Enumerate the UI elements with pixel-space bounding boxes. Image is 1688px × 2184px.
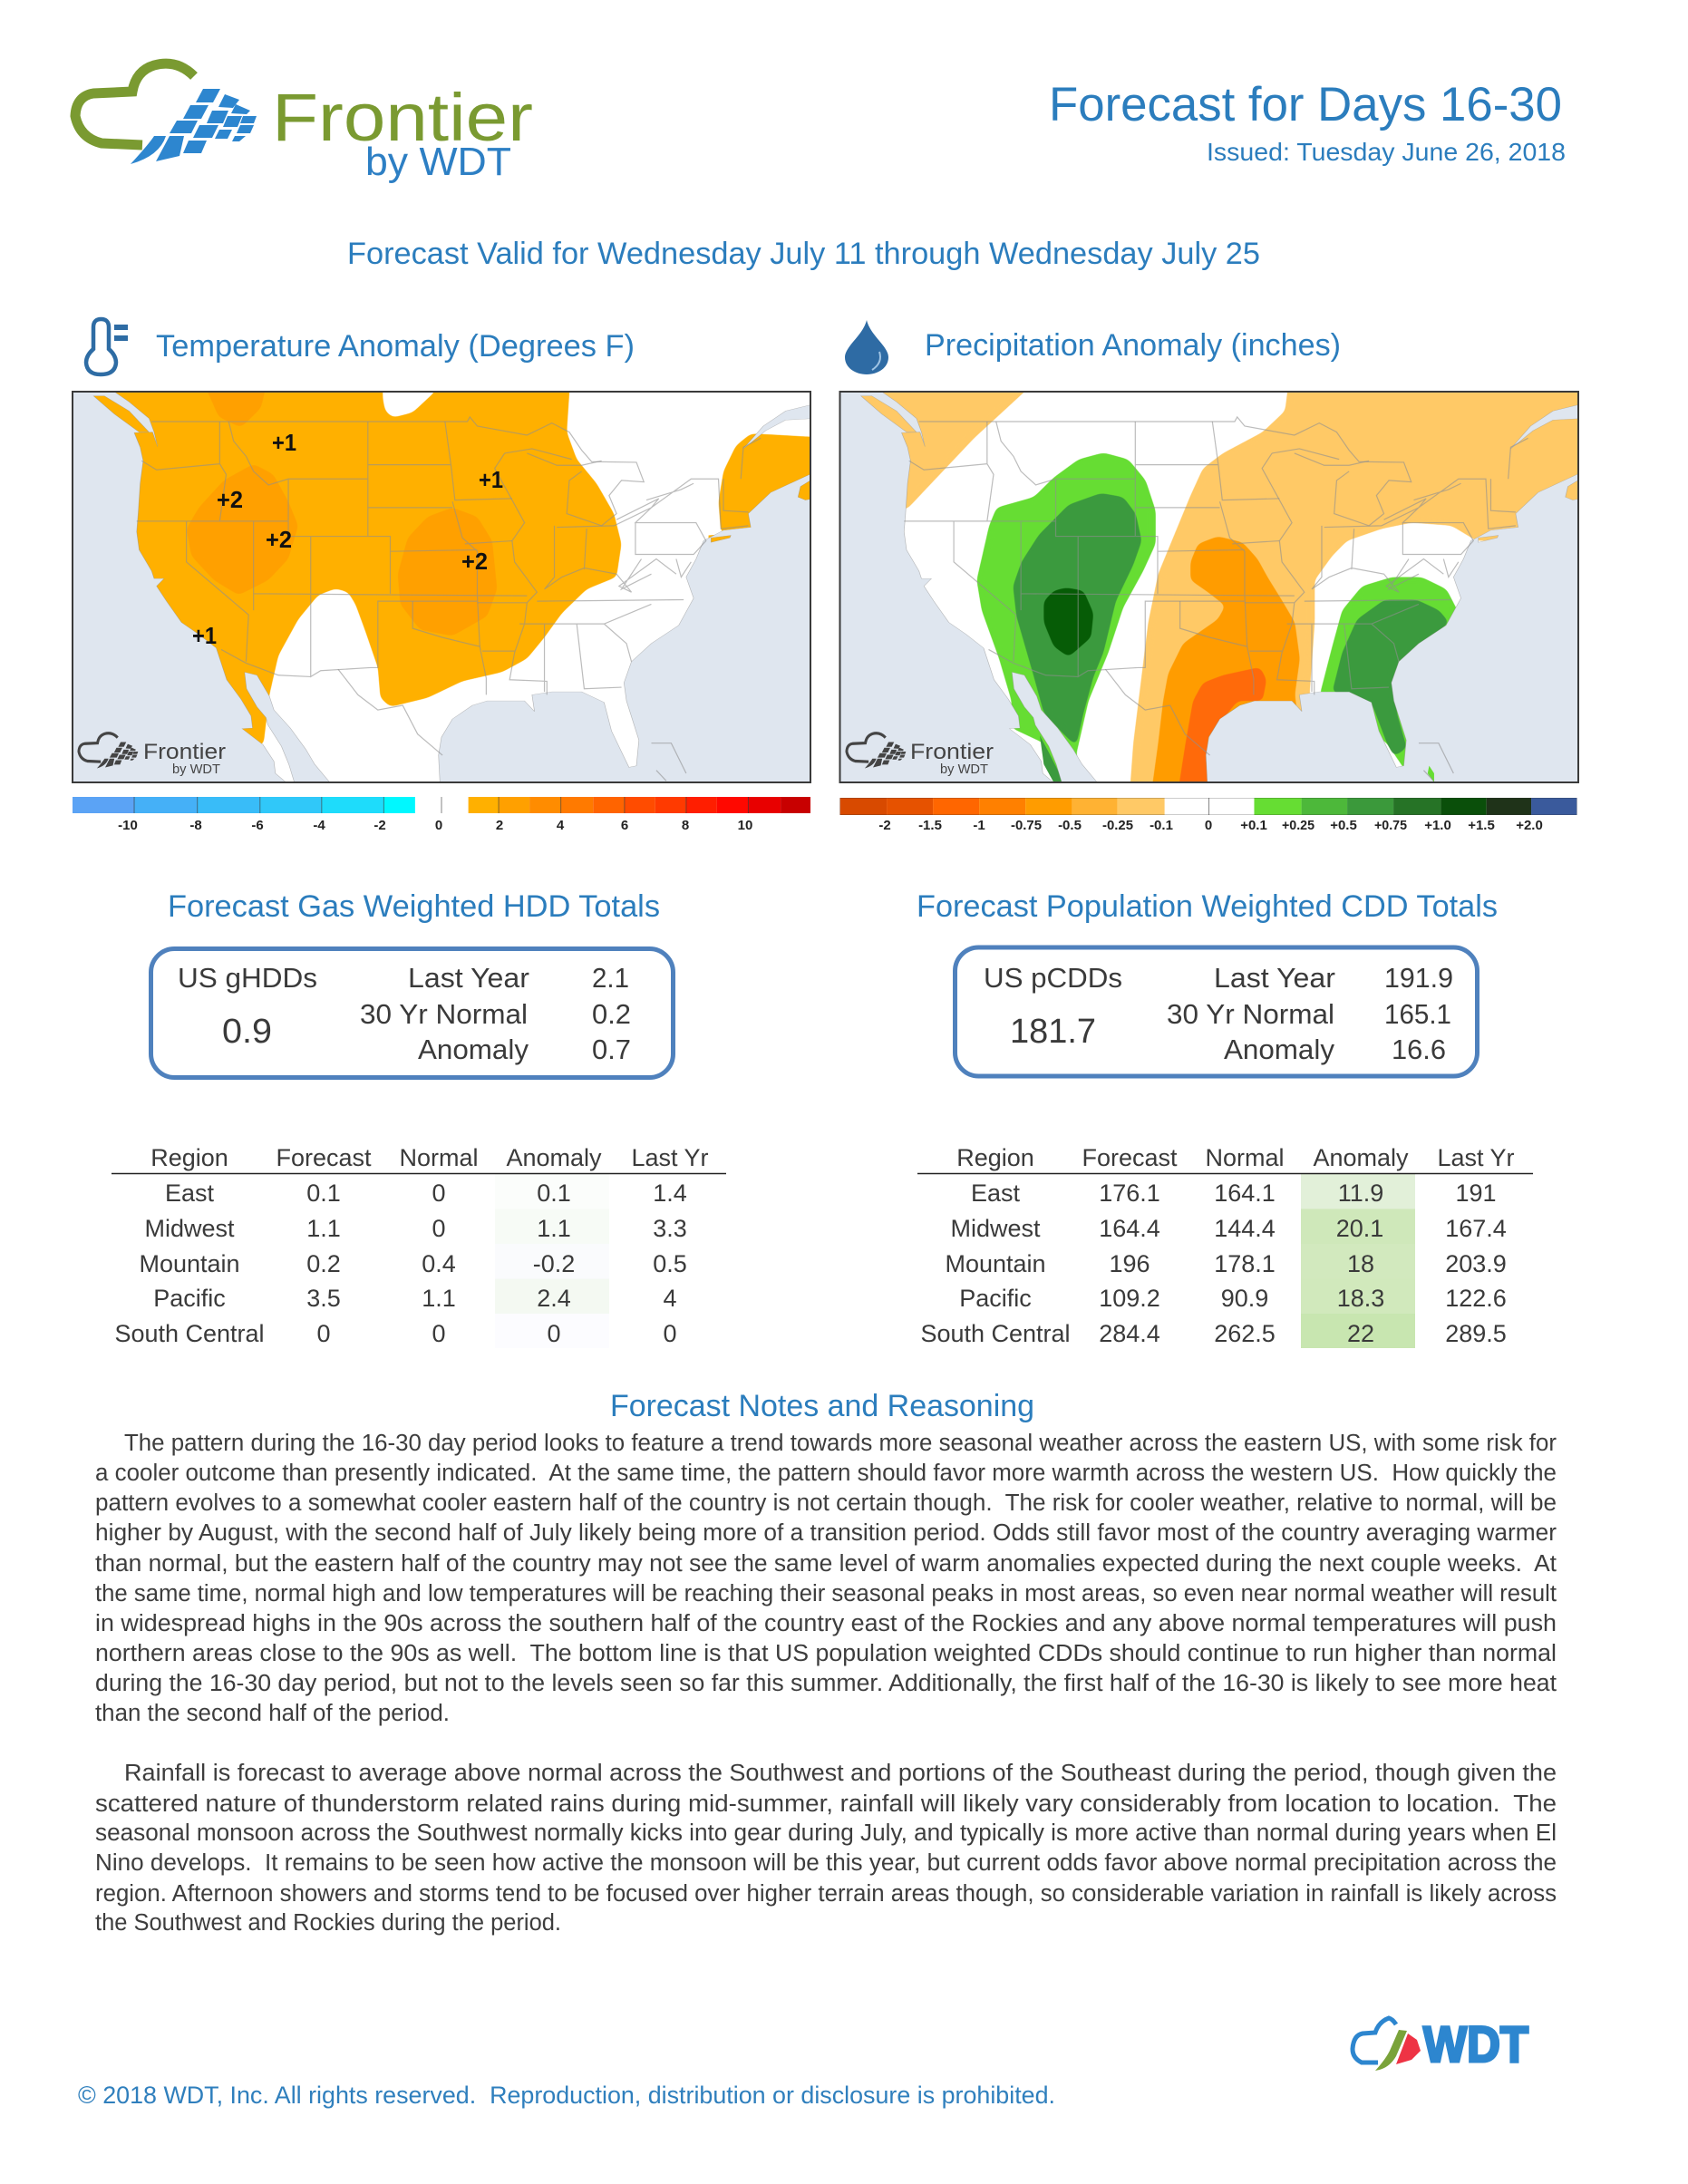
legend: temperature colour scale: -8 — [189, 818, 202, 833]
summary box: US gHDDs: 2.1 — [592, 962, 629, 994]
table: HDD by region: 0 — [432, 1215, 446, 1242]
text block: rainfall notes: scattered nature of thunderstorm related rains during mid-summer, rainfall will likely vary considerably from location to location. The — [95, 1791, 1557, 1817]
text block: temperature notes: higher by August, with the second half of July likely being more of a transition period. Odds still favor most of the country averaging warmer — [95, 1520, 1557, 1546]
table: CDD by region: 176.1 — [1099, 1179, 1160, 1207]
map labels: +1 — [272, 429, 296, 456]
legend: precipitation colour scale: +0.1 — [1240, 818, 1267, 833]
icon: thermometer — [86, 319, 128, 374]
summary box: US pCDDs: 191.9 — [1384, 962, 1453, 994]
summary box: US pCDDs: 181.7 — [1010, 1013, 1096, 1051]
heading: precipitation anomaly: Precipitation Anomaly (inches) — [925, 328, 1341, 363]
logo: Frontier by WDT — [75, 63, 533, 184]
legend: temperature colour scale: 10 — [738, 818, 752, 833]
table: HDD by region: 1.1 — [306, 1215, 341, 1242]
footer: copyright: © 2018 WDT, Inc. All rights reserved. Reproduction, distribution or disclosure is prohibited. — [78, 2082, 1055, 2109]
table: CDD by region: Mountain — [945, 1250, 1046, 1277]
logo: WDT — [1353, 2015, 1528, 2072]
table: HDD by region: 2.4 — [537, 1285, 571, 1312]
map labels — [192, 429, 503, 649]
map logo — [79, 733, 226, 777]
legend: temperature colour scale: 6 — [621, 818, 628, 833]
table: CDD by region: 18 — [1347, 1250, 1374, 1277]
map frame — [839, 392, 1578, 782]
text block: temperature notes — [95, 1431, 1557, 1726]
legend: temperature colour scale: 0 — [435, 818, 442, 833]
table: HDD by region: 1.1 — [537, 1215, 571, 1242]
map labels: +2 — [217, 486, 243, 513]
table: HDD by region: 0 — [663, 1320, 677, 1347]
legend: temperature colour scale: -6 — [251, 818, 264, 833]
table: HDD by region: 0.1 — [537, 1179, 571, 1207]
table: CDD by region: 196 — [1109, 1250, 1150, 1277]
legend: precipitation colour scale: -1 — [973, 818, 985, 833]
text block: rainfall notes — [95, 1761, 1557, 1936]
table: CDD by region: Normal — [1205, 1144, 1285, 1171]
legend: precipitation colour scale — [839, 798, 1577, 833]
summary box: US gHDDs: 0.7 — [592, 1034, 631, 1065]
table: HDD by region: 0 — [432, 1179, 446, 1207]
summary box: US gHDDs: Last Year — [408, 962, 529, 994]
title: Forecast for Days 16-30: Forecast for Days 16-30 — [1049, 78, 1562, 131]
table: CDD by region: 284.4 — [1099, 1320, 1160, 1347]
table: CDD by region: Anomaly — [1313, 1144, 1409, 1171]
table: HDD by region: 1.4 — [653, 1179, 687, 1207]
legend: precipitation colour scale: -0.1 — [1150, 818, 1173, 833]
legend: precipitation colour scale: -0.75 — [1011, 818, 1042, 833]
table: HDD by region: 0 — [316, 1320, 331, 1347]
table: CDD by region: 167.4 — [1445, 1215, 1507, 1242]
text block: temperature notes: the same time, normal high and low temperatures will be reaching their seasonal peaks in most areas, so even near normal weather will result — [95, 1581, 1557, 1606]
table: HDD by region: 0.4 — [422, 1250, 456, 1277]
legend: precipitation colour scale: 0 — [1205, 818, 1212, 833]
legend: precipitation colour scale: +0.75 — [1374, 818, 1407, 833]
table: CDD by region: 109.2 — [1099, 1285, 1160, 1312]
summary box: US pCDDs: 30 Yr Normal — [1167, 998, 1334, 1030]
heading: HDD totals: Forecast Gas Weighted HDD Totals — [168, 889, 660, 924]
panel: precipitation anomaly — [810, 320, 1621, 833]
legend: precipitation colour scale: +2.0 — [1516, 818, 1543, 833]
map: precipitation anomaly — [839, 391, 1579, 783]
text block: temperature notes: northern areas close to the 90s as well. The bottom line is that US population weighted CDDs should continue to run higher than normal — [95, 1641, 1557, 1666]
legend: temperature colour scale: 2 — [496, 818, 503, 833]
legend: temperature colour scale: -4 — [313, 818, 325, 833]
legend: precipitation colour scale: +1.0 — [1424, 818, 1451, 833]
table: CDD by region: Forecast — [1082, 1144, 1178, 1171]
table: HDD by region: Mountain — [139, 1250, 240, 1277]
summary box: US pCDDs: 165.1 — [1384, 998, 1451, 1030]
summary box: US pCDDs: US pCDDs — [984, 962, 1122, 994]
legend: temperature colour scale: -2 — [373, 818, 386, 833]
text block: rainfall notes: Rainfall is forecast to average above normal across the Southwest and portions of the Southeast during the period, though given the — [124, 1761, 1557, 1786]
table: HDD by region: 0.5 — [653, 1250, 687, 1277]
table: CDD by region: 164.1 — [1214, 1179, 1276, 1207]
summary box: US pCDDs: Last Year — [1214, 962, 1335, 994]
summary box: US gHDDs: Anomaly — [418, 1034, 529, 1065]
table: HDD by region: Region — [150, 1144, 228, 1171]
table: CDD by region — [917, 1144, 1533, 1348]
map labels: +1 — [479, 466, 503, 493]
table: HDD by region: 3.5 — [306, 1285, 341, 1312]
table: CDD by region: Last Yr — [1437, 1144, 1515, 1171]
table: HDD by region: 3.3 — [653, 1215, 687, 1242]
table: HDD by region — [112, 1144, 726, 1348]
table: CDD by region: 18.3 — [1337, 1285, 1384, 1312]
table: HDD by region: 0 — [547, 1320, 561, 1347]
panel: gas weighted HDD — [112, 889, 726, 1348]
table: CDD by region: 90.9 — [1221, 1285, 1268, 1312]
legend: precipitation colour scale: +0.5 — [1330, 818, 1357, 833]
text block: temperature notes: in widespread highs in the 90s across the southern half of the country east of the Rockies and any above normal temperatures will push — [95, 1611, 1557, 1636]
table: HDD by region: 0 — [432, 1320, 446, 1347]
map logo: Frontier — [143, 740, 226, 764]
text block: temperature notes: The pattern during the 16-30 day period looks to feature a trend towards more seasonal weather across the eastern US, with some risk for — [124, 1431, 1557, 1456]
panel: population weighted CDD — [917, 889, 1533, 1348]
legend: temperature colour scale: 8 — [682, 818, 689, 833]
legend: precipitation colour scale: +0.25 — [1282, 818, 1315, 833]
heading: forecast notes: Forecast Notes and Reasoning — [610, 1389, 1034, 1423]
summary box: US pCDDs: Anomaly — [1224, 1034, 1335, 1065]
text block: rainfall notes: region. Afternoon showers and storms tend to be focused over higher terrain areas though, so considerable variation in rainfall is likely across — [95, 1881, 1557, 1907]
table: CDD by region: 191 — [1455, 1179, 1497, 1207]
table: CDD by region: South Central — [920, 1320, 1071, 1347]
legend: temperature colour scale: -10 — [118, 818, 138, 833]
table: HDD by region: Midwest — [144, 1215, 235, 1242]
text block: rainfall notes: the Southwest and Rockies during the period. — [95, 1910, 561, 1936]
summary box: US gHDDs: 30 Yr Normal — [360, 998, 528, 1030]
legend: precipitation colour scale: +1.5 — [1468, 818, 1495, 833]
table: HDD by region: Normal — [399, 1144, 479, 1171]
table: CDD by region: Region — [956, 1144, 1034, 1171]
map labels: +2 — [266, 526, 292, 553]
table: HDD by region: 0.2 — [306, 1250, 341, 1277]
table: CDD by region: 144.4 — [1214, 1215, 1276, 1242]
table: CDD by region: 289.5 — [1445, 1320, 1507, 1347]
map labels: +2 — [461, 548, 488, 575]
icon: water drop — [845, 320, 888, 374]
text block: temperature notes: during the 16-30 day period, but not to the levels seen so far this summer. Additionally, the first half of the 16-30 is likely to see more heat — [95, 1671, 1557, 1696]
map logo: Frontier — [910, 740, 994, 764]
logo: WDT: WDT — [1423, 2015, 1528, 2072]
map: temperature anomaly — [72, 391, 811, 783]
text block: rainfall notes: Nino develops. It remains to be seen how active the monsoon will be this year, but current odds favor above normal precipitation across the — [95, 1850, 1557, 1876]
map logo — [847, 733, 994, 777]
legend: precipitation colour scale: -0.25 — [1102, 818, 1133, 833]
issued date: Issued: Tuesday June 26, 2018 — [1207, 138, 1566, 166]
table: HDD by region: South Central — [114, 1320, 265, 1347]
summary box: US pCDDs: 16.6 — [1392, 1034, 1446, 1065]
table: HDD by region: Forecast — [276, 1144, 372, 1171]
text block: rainfall notes: seasonal monsoon across the Southwest normally kicks into gear during July, and typically is more active than normal during years when El — [95, 1820, 1557, 1846]
table: HDD by region: Anomaly — [506, 1144, 602, 1171]
heading: CDD totals: Forecast Population Weighted CDD Totals — [917, 889, 1498, 924]
table: HDD by region: -0.2 — [533, 1250, 575, 1277]
table: CDD by region: East — [971, 1179, 1021, 1207]
table: CDD by region: 262.5 — [1214, 1320, 1276, 1347]
table: CDD by region: 22 — [1347, 1320, 1374, 1347]
table: CDD by region: 164.4 — [1099, 1215, 1160, 1242]
heading: forecast valid dates: Forecast Valid for Wednesday July 11 through Wednesday July 25 — [347, 237, 1260, 271]
table: HDD by region: Pacific — [153, 1285, 226, 1312]
table: CDD by region: 203.9 — [1445, 1250, 1507, 1277]
legend: temperature colour scale — [73, 797, 810, 833]
summary box: US gHDDs: 0.9 — [222, 1013, 272, 1051]
logo: Frontier by WDT: Frontier — [272, 80, 533, 155]
text block: temperature notes: than normal, but the eastern half of the country may not see the same level of warm anomalies expected during the next couple weeks. At — [95, 1551, 1557, 1577]
legend: precipitation colour scale: -1.5 — [918, 818, 942, 833]
table: HDD by region: 1.1 — [422, 1285, 456, 1312]
summary box: US gHDDs: US gHDDs — [178, 962, 317, 994]
map logo: by WDT — [940, 762, 988, 777]
panel: temperature anomaly — [40, 319, 850, 833]
summary box: US gHDDs — [150, 948, 673, 1077]
table: CDD by region: Pacific — [959, 1285, 1032, 1312]
legend: precipitation colour scale: -2 — [878, 818, 891, 833]
table: CDD by region: 178.1 — [1214, 1250, 1276, 1277]
map frame — [73, 392, 810, 782]
text block: temperature notes: pattern evolves to a somewhat cooler eastern half of the country is not certain though. The risk for cooler weather, relative to normal, will be — [95, 1490, 1557, 1516]
table: CDD by region: Midwest — [950, 1215, 1041, 1242]
text block: temperature notes: than the second half of the period. — [95, 1701, 450, 1726]
legend: temperature colour scale: 4 — [557, 818, 565, 833]
table: CDD by region: 20.1 — [1336, 1215, 1383, 1242]
table: CDD by region: 11.9 — [1338, 1179, 1383, 1207]
table: HDD by region: 0.1 — [306, 1179, 341, 1207]
summary box: US pCDDs — [956, 947, 1478, 1076]
table: CDD by region: 122.6 — [1445, 1285, 1507, 1312]
summary box: US gHDDs: 0.2 — [592, 998, 631, 1030]
table: HDD by region: Last Yr — [631, 1144, 709, 1171]
table: HDD by region: 4 — [663, 1285, 677, 1312]
legend: precipitation colour scale: -0.5 — [1058, 818, 1082, 833]
map labels: +1 — [192, 622, 217, 649]
table: HDD by region: East — [165, 1179, 215, 1207]
logo: Frontier by WDT: by WDT — [365, 140, 511, 184]
map logo: by WDT — [172, 762, 220, 777]
text block: temperature notes: a cooler outcome than presently indicated. At the same time, the pattern should favor more warmth across the western US. How quickly the — [95, 1461, 1557, 1486]
heading: temperature anomaly: Temperature Anomaly (Degrees F) — [156, 329, 635, 364]
